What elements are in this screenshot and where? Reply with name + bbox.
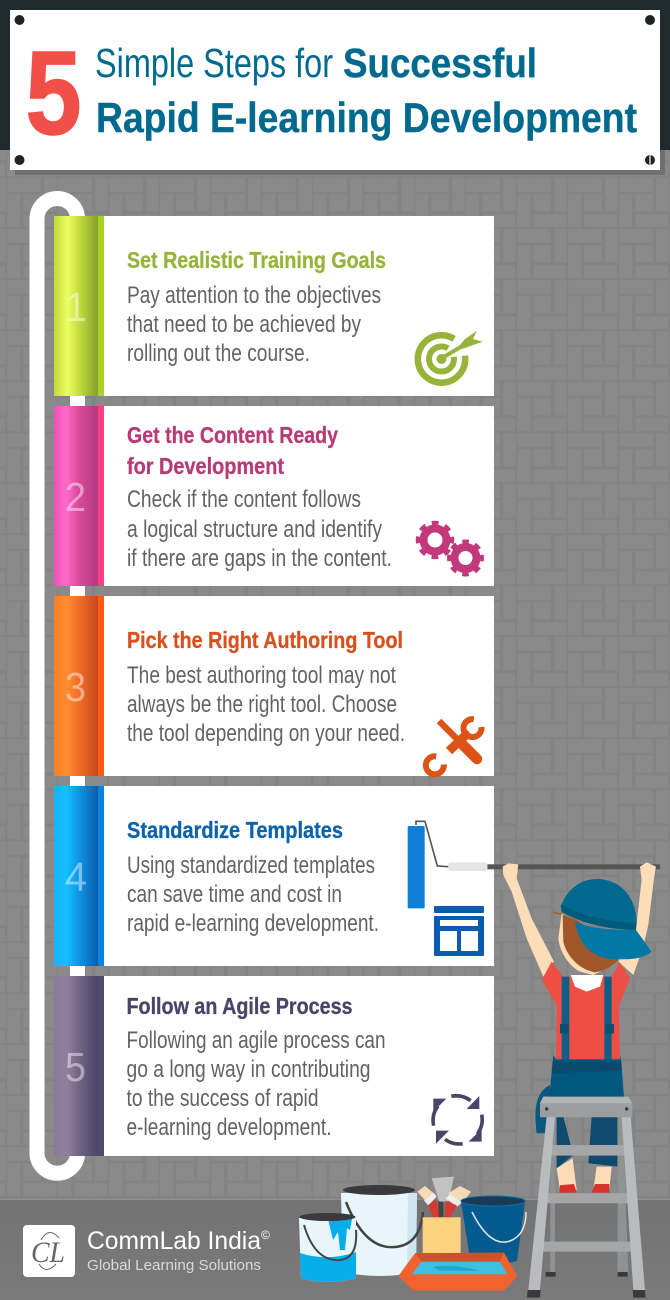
step 3 colour strip bbox=[54, 596, 98, 776]
arms bbox=[503, 862, 656, 977]
big number 5: 5 bbox=[26, 27, 82, 160]
step 4 body: can save time and cost in bbox=[127, 881, 342, 908]
step 3 heading: Pick the Right Authoring Tool bbox=[127, 627, 403, 653]
step 2 body bbox=[127, 486, 392, 572]
legs behind ladder bbox=[535, 1085, 617, 1193]
step 1 body: that need to be achieved by bbox=[127, 311, 361, 338]
panel: step 1 bbox=[54, 216, 494, 396]
logo name: CommLab India bbox=[87, 1227, 261, 1255]
icon: wrench and screwdriver bbox=[426, 719, 481, 774]
step 5 body bbox=[126, 1027, 386, 1141]
step 1 heading: Set Realistic Training Goals bbox=[127, 247, 386, 273]
title line 1 regular: Simple Steps for bbox=[95, 40, 333, 86]
step 5 colour strip bbox=[54, 976, 98, 1156]
step 5 number: 5 bbox=[65, 1044, 86, 1090]
paint tray bbox=[398, 1253, 517, 1291]
step 5 heading: Follow an Agile Process bbox=[126, 993, 352, 1019]
white tube connector bbox=[37, 198, 78, 1173]
hair bbox=[553, 912, 618, 972]
title banner bbox=[10, 10, 665, 175]
step 3 body: always be the right tool. Choose bbox=[127, 691, 397, 718]
title line 1 bold: Successful bbox=[343, 40, 537, 86]
step 1 body: rolling out the course. bbox=[127, 340, 310, 367]
step 2 number: 2 bbox=[65, 474, 86, 520]
step 2 heading: for Development bbox=[127, 453, 284, 479]
step 4 body bbox=[127, 852, 379, 937]
big white bucket bbox=[341, 1185, 423, 1276]
panel: step 4 bbox=[54, 786, 494, 966]
step 2 colour strip bbox=[54, 406, 98, 586]
step 1 body bbox=[127, 282, 381, 367]
step 4 colour strip bbox=[54, 786, 98, 966]
step 4 number: 4 bbox=[65, 854, 87, 900]
step 5 body: Following an agile process can bbox=[126, 1027, 386, 1054]
hat bbox=[561, 879, 652, 959]
painter on step ladder bbox=[408, 821, 660, 1298]
step 1 body: Pay attention to the objectives bbox=[127, 282, 381, 309]
step 5 body: to the success of rapid bbox=[126, 1085, 318, 1112]
roller cage and pole bbox=[408, 821, 660, 908]
step 2 body: Check if the content follows bbox=[127, 486, 361, 513]
logo: CommLab India bbox=[23, 1225, 270, 1277]
step 3 body bbox=[127, 662, 405, 747]
suspenders bbox=[560, 977, 614, 1060]
brushes and scraper in cup bbox=[417, 1177, 471, 1256]
step 2 heading bbox=[127, 422, 338, 479]
logo badge bbox=[23, 1225, 75, 1277]
panel: step 5 bbox=[54, 976, 494, 1156]
step 2 heading: Get the Content Ready bbox=[127, 422, 338, 448]
step 1 colour strip bbox=[54, 216, 98, 396]
icon: agile cycle arrows bbox=[433, 1096, 482, 1144]
copyright mark: © bbox=[261, 1228, 270, 1242]
step 4 body: Using standardized templates bbox=[127, 852, 375, 879]
pants bbox=[549, 1055, 624, 1097]
shirt bbox=[542, 962, 630, 1060]
step 5 body: go a long way in contributing bbox=[126, 1056, 370, 1083]
paint buckets and tools bbox=[299, 1177, 526, 1291]
step ladder bbox=[527, 1097, 646, 1298]
collar bbox=[571, 975, 603, 992]
rivets bbox=[14, 15, 655, 165]
step 3 number: 3 bbox=[65, 664, 86, 710]
neck and face edge bbox=[558, 913, 613, 975]
step 1 number: 1 bbox=[65, 284, 87, 330]
step 2 body: if there are gaps in the content. bbox=[127, 545, 392, 572]
icon: template layout bbox=[434, 906, 484, 956]
step 4 heading: Standardize Templates bbox=[127, 817, 343, 843]
step 2 body: a logical structure and identify bbox=[127, 516, 382, 543]
blue bucket bbox=[461, 1196, 526, 1264]
step 5 body: e-learning development. bbox=[126, 1114, 332, 1141]
step 3 body: the tool depending on your need. bbox=[127, 720, 405, 747]
logo badge: CL bbox=[31, 1236, 65, 1269]
icon: gears bbox=[418, 523, 482, 574]
icon: target bbox=[418, 326, 483, 383]
panel: step 2 bbox=[54, 406, 494, 586]
step 3 body: The best authoring tool may not bbox=[127, 662, 396, 689]
step 4 body: rapid e-learning development. bbox=[127, 910, 379, 937]
panel: step 3 bbox=[54, 596, 494, 776]
small bucket with blue paint bbox=[299, 1213, 356, 1282]
logo tagline: Global Learning Solutions bbox=[87, 1257, 261, 1274]
